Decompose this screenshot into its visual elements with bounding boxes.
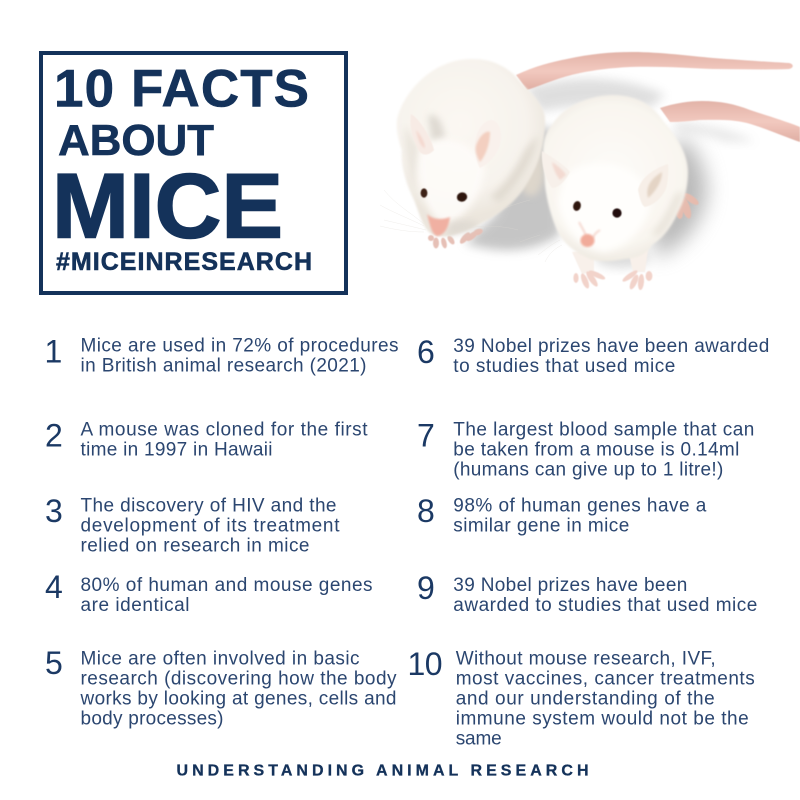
fact 3 (45, 493, 340, 557)
nose (427, 214, 450, 236)
fact 1 (44, 334, 398, 377)
fact 9 (417, 570, 757, 616)
front paws (572, 250, 652, 291)
left ear (542, 151, 570, 188)
fact 6: 6 (417, 334, 435, 370)
heading: mice: MICE (52, 155, 283, 257)
fact 2 (45, 418, 368, 461)
fact 3: The discovery of HIV and the (80, 496, 336, 517)
left ear (410, 114, 434, 155)
fact 2: A mouse was cloned for the first (80, 420, 368, 441)
fact 7 (417, 418, 754, 481)
fact 10: same (456, 728, 502, 749)
tail: front mouse (660, 101, 800, 142)
front mouse (520, 95, 700, 291)
whiskers (380, 190, 530, 232)
fact 8: similar gene in mice (453, 516, 629, 537)
tail: back mouse (516, 52, 793, 90)
fact 8: 98% of human genes have a (453, 496, 707, 517)
fact 5: works by looking at genes, cells and (80, 688, 396, 709)
back mouse (380, 59, 545, 249)
fact 6: to studies that used mice (453, 356, 675, 377)
hashtag: #MICEINRESEARCH (56, 248, 312, 276)
fact 5 (45, 645, 397, 729)
title box (41, 53, 346, 293)
fact 9: 39 Nobel prizes have been (453, 575, 687, 596)
fact 3: development of its treatment (80, 516, 340, 537)
fact 3: 3 (45, 493, 63, 529)
fact 8: 8 (417, 493, 435, 529)
heading: 10 facts: 10 FACTS (54, 60, 309, 119)
fact 10: 10 (408, 646, 442, 682)
fact 10: and our understanding of the (456, 688, 715, 709)
fact 7: The largest blood sample that can (453, 420, 754, 441)
paws (428, 227, 484, 249)
fact 10: most vaccines, cancer treatments (456, 668, 755, 689)
fact 9: 9 (417, 570, 435, 606)
fact 10: Without mouse research, IVF, (456, 648, 716, 669)
fact 8 (417, 493, 707, 537)
body (397, 59, 545, 237)
fact 4: 4 (45, 569, 63, 605)
hind paw (674, 191, 700, 220)
muzzle shading (446, 221, 480, 236)
lower body shading (650, 190, 684, 235)
fact 4: 80% of human and mouse genes (80, 575, 372, 596)
fact 5: Mice are often involved in basic (80, 648, 360, 669)
fact 6 (417, 334, 769, 377)
fact 4 (45, 569, 372, 616)
fact 1: in British animal research (2021) (80, 356, 366, 377)
nose (580, 234, 594, 247)
fact 5: 5 (45, 645, 63, 681)
fur highlight (558, 163, 651, 252)
fact 2: time in 1997 in Hawaii (80, 440, 272, 461)
body (543, 95, 688, 261)
fact 7: be taken from a mouse is 0.14ml (453, 440, 739, 461)
fact 10 (408, 646, 755, 749)
footer organisation name: UNDERSTANDING ANIMAL RESEARCH (176, 763, 588, 780)
illustration: two white mice (380, 52, 800, 291)
fact 3: relied on research in mice (80, 536, 310, 557)
whiskers (520, 235, 562, 262)
right ear (475, 120, 501, 168)
fact 4: are identical (80, 595, 190, 616)
fact 1: Mice are used in 72% of procedures (80, 336, 398, 357)
fact 10: immune system would not be the (456, 708, 749, 729)
fact 5: research (discovering how the body (80, 668, 397, 689)
snout markings (579, 222, 600, 238)
eyes (572, 200, 582, 212)
cast shadows (465, 79, 755, 268)
fact 6: 39 Nobel prizes have been awarded (453, 336, 769, 357)
fur shading (428, 115, 445, 142)
right ear (638, 164, 668, 207)
fact 5: body processes) (80, 708, 224, 729)
heading: about: ABOUT (58, 116, 214, 165)
eyes (421, 188, 427, 198)
fact 2: 2 (45, 418, 63, 454)
fact 7: (humans can give up to 1 litre!) (453, 460, 723, 481)
fact 7: 7 (417, 418, 435, 454)
fact 9: awarded to studies that used mice (453, 595, 757, 616)
fact 1: 1 (44, 334, 62, 370)
hind leg (518, 144, 544, 196)
